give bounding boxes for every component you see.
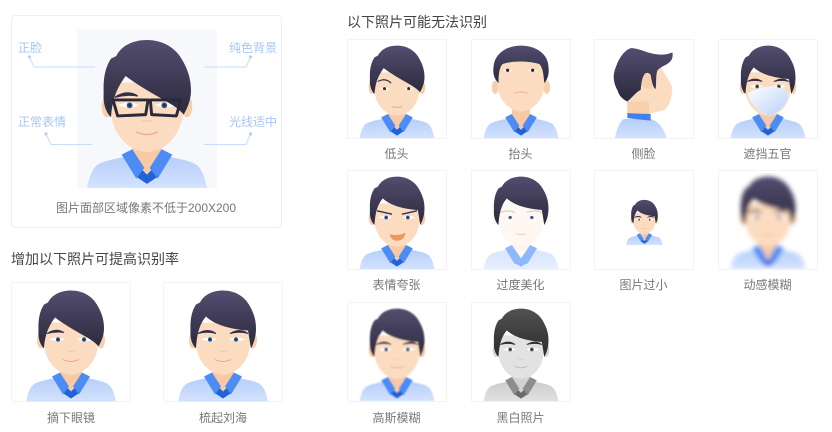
card: 过度美化 [472, 170, 570, 292]
card: 遮挡五官 [718, 40, 818, 161]
avatar with glasses [87, 40, 207, 188]
card: 遮挡五官: 遮挡五官 [743, 146, 792, 161]
card: 摘下眼镜: 摘下眼镜 [47, 410, 95, 425]
card: 摘下眼镜 [12, 282, 130, 425]
callout: 正常表情 [18, 115, 92, 144]
photo background [77, 29, 217, 188]
card: 低头: 低头 [384, 147, 409, 161]
panel: standard photo [12, 16, 282, 228]
card: 图片过小: 图片过小 [619, 278, 668, 292]
callout: 光线适中 [204, 114, 277, 144]
callout: 光线适中: 光线适中 [229, 114, 277, 129]
card: 梳起刘海: 梳起刘海 [199, 410, 247, 425]
card: 表情夸张: 表情夸张 [372, 278, 421, 292]
callout: 纯色背景: 纯色背景 [229, 41, 277, 55]
card: 低头 [348, 40, 446, 161]
card: 图片过小 [594, 170, 694, 292]
card: 高斯模糊: 高斯模糊 [372, 410, 421, 425]
callout: 正常表情: 正常表情 [18, 115, 66, 129]
heading: improve recognition: 增加以下照片可提高识别率 [11, 251, 179, 267]
card: 高斯模糊 [348, 302, 446, 425]
card: 动感模糊: 动感模糊 [743, 277, 792, 292]
caption: pixel requirement: 图片面部区域像素不低于200X200 [56, 200, 236, 215]
card: 侧脸: 侧脸 [631, 147, 656, 161]
card: 过度美化: 过度美化 [496, 277, 545, 292]
callout: 正脸 [18, 41, 95, 67]
card: 黑白照片: 黑白照片 [496, 410, 545, 425]
card: 梳起刘海 [164, 282, 282, 425]
card: 黑白照片 [472, 302, 570, 425]
callout: 纯色背景 [204, 41, 277, 67]
card: 表情夸张 [348, 170, 446, 292]
card: 动感模糊 [718, 170, 818, 292]
heading: may not be recognized: 以下照片可能无法识别 [347, 14, 487, 30]
callout: 正脸: 正脸 [18, 41, 42, 55]
card: 抬头 [472, 40, 570, 161]
card: 侧脸 [594, 40, 694, 161]
card: 抬头: 抬头 [508, 147, 533, 161]
